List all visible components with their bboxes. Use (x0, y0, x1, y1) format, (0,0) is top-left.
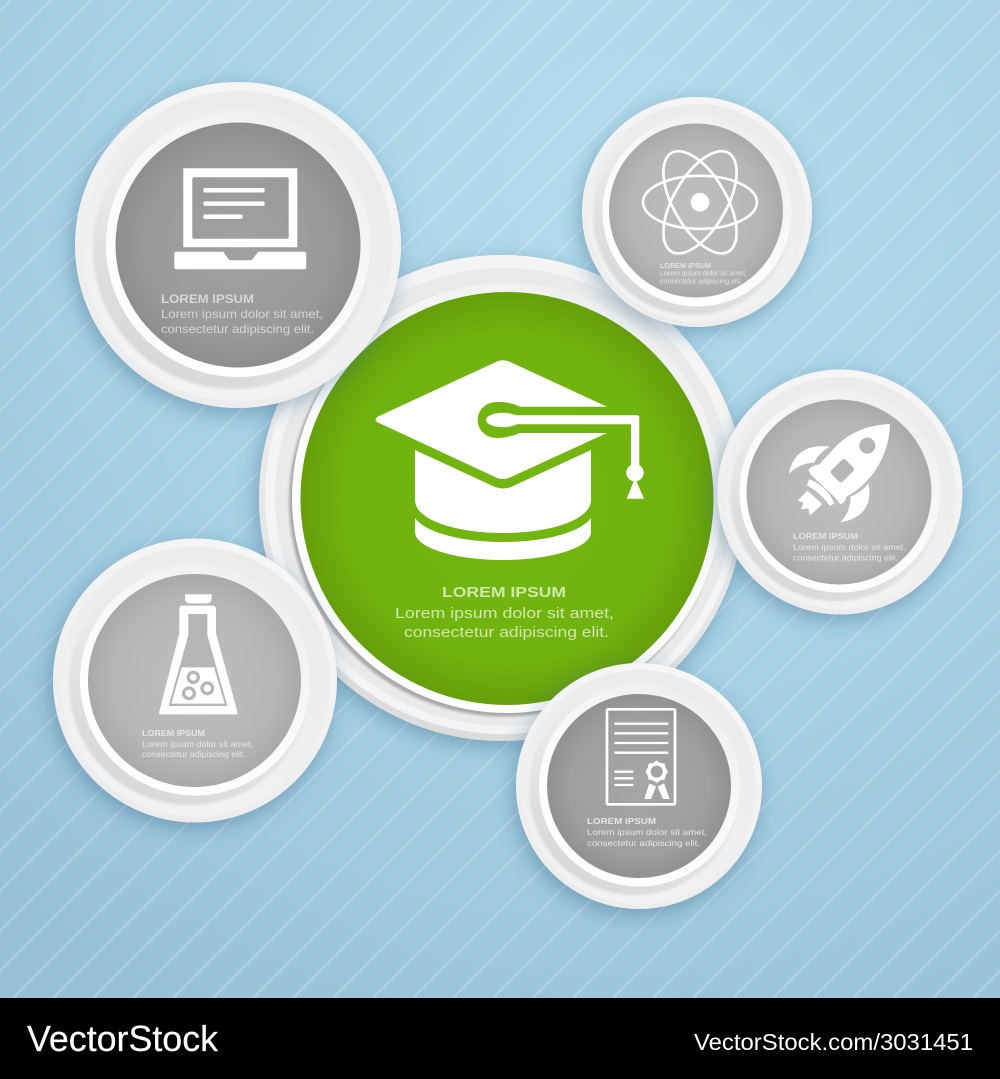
text: certificate caption: LOREM IPSUM (587, 816, 656, 826)
icon: flask (159, 594, 237, 714)
text: laptop caption: consectetur adipiscing elit. (161, 322, 314, 336)
text: laptop caption: Lorem ipsum dolor sit amet, (161, 307, 323, 321)
text: atom caption (660, 263, 747, 286)
text: flask caption: LOREM IPSUM (142, 728, 205, 738)
icon: laptop (174, 168, 306, 269)
panel: flask circle (53, 538, 337, 822)
icon: atom (643, 140, 757, 265)
text: central caption: Lorem ipsum dolor sit amet, (395, 605, 614, 622)
icon: certificate (607, 709, 675, 804)
text: certificate caption: Lorem ipsum dolor sit amet, (587, 827, 707, 837)
panel: certificate circle (516, 663, 762, 909)
text: certificate caption: consectetur adipiscing elit. (587, 838, 700, 848)
footer: watermark bar (0, 998, 1000, 1079)
panel: laptop circle (75, 82, 401, 408)
text: laptop caption (161, 292, 323, 336)
text: flask caption: Lorem ipsum dolor sit amet, (142, 739, 253, 749)
text: flask caption: consectetur adipiscing elit. (142, 749, 245, 759)
text: flask caption (142, 728, 253, 759)
panel: central graduation circle (259, 255, 745, 741)
text: atom caption: Lorem ipsum dolor sit amet, (660, 270, 747, 278)
text: atom caption: LOREM IPSUM (660, 263, 711, 270)
panel: atom circle (582, 97, 812, 327)
icon: rocket (789, 424, 890, 522)
text: VectorStock logo: VectorStock (27, 1018, 219, 1059)
text: rocket caption: Lorem ipsum dolor sit amet, (793, 542, 906, 552)
text: central caption (395, 584, 614, 641)
text: central caption: consectetur adipiscing elit. (404, 624, 609, 641)
text: certificate caption (587, 816, 707, 848)
icon: graduation cap (376, 360, 644, 560)
text: laptop caption: LOREM IPSUM (161, 292, 254, 306)
text: central caption: LOREM IPSUM (442, 584, 566, 601)
panel: rocket circle (718, 370, 962, 614)
text: rocket caption: LOREM IPSUM (793, 531, 858, 541)
text: rocket caption: consectetur adipiscing elit. (793, 552, 898, 562)
text: image id: VectorStock.com/3031451 (694, 1029, 973, 1055)
text: atom caption: consectetur adipiscing elit. (660, 278, 742, 286)
text: rocket caption (793, 531, 906, 562)
